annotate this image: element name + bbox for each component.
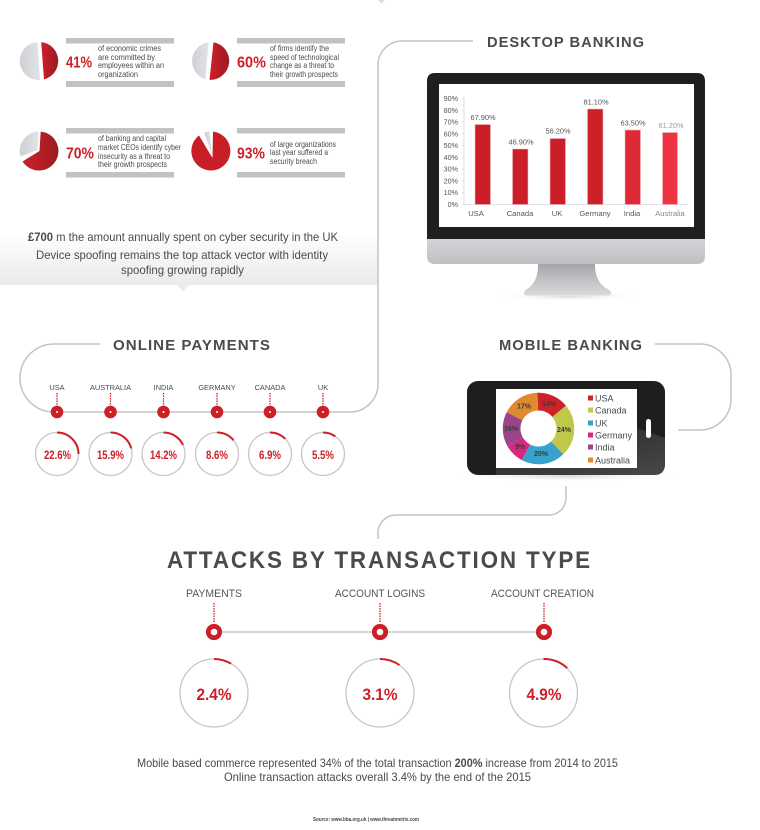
donut legend: Australia (595, 456, 630, 466)
phone shadow (448, 470, 684, 482)
country labels: INDIA (154, 383, 173, 392)
category labels: PAYMENTS (186, 588, 242, 600)
donut legend: UK (595, 418, 608, 428)
stat bars (66, 128, 174, 178)
pie 93% (191, 132, 230, 170)
callout text: £700 m the amount annually spent on cyber security in the UK (28, 230, 338, 244)
description: organization (98, 70, 138, 79)
country labels: AUSTRALIA (90, 383, 131, 392)
description: of large organizations (270, 140, 336, 149)
value labels: 67.90% (470, 113, 496, 122)
ring values: 3.1% (362, 685, 398, 704)
heading: desktop banking: DESKTOP BANKING (487, 35, 645, 51)
dotted stems (57, 393, 323, 406)
country labels: USA (49, 383, 65, 392)
closing statement: Mobile based commerce represented 34% of the total transaction 200% increase from 2014 to 2015 (137, 756, 618, 770)
axes (462, 98, 688, 204)
transaction type timeline (180, 588, 594, 727)
online payments timeline (36, 383, 344, 476)
percentage rings (36, 432, 344, 476)
description (98, 44, 164, 79)
callout band: UK spending and device spoofing (0, 230, 378, 291)
pie 70% (20, 132, 58, 171)
value labels: 63.50% (620, 118, 646, 128)
value 70%: 70% (66, 146, 94, 162)
donut labels: 9% (515, 444, 526, 451)
phone body (467, 381, 665, 475)
y axis labels: 90% (444, 94, 459, 103)
donut legend: USA (595, 394, 614, 404)
value 60%: 60% (237, 54, 266, 72)
callout text: spoofing growing rapidly (121, 263, 244, 277)
connector line: mobile banking (655, 344, 731, 430)
ring values: 15.9% (97, 450, 124, 462)
donut labels: 24% (557, 427, 572, 434)
donut legend (588, 394, 633, 466)
description: of economic crimes (98, 44, 161, 53)
stat bars (66, 38, 174, 87)
donut labels (504, 401, 572, 458)
description: insecurity as a threat to (98, 152, 170, 161)
ring values: 4.9% (526, 685, 562, 704)
y axis labels: 70% (444, 118, 459, 126)
monitor stand (496, 264, 640, 302)
stat bars (237, 128, 345, 178)
category labels (468, 209, 686, 218)
value 41%: 41% (66, 54, 92, 72)
donut chart (504, 401, 572, 458)
description (98, 134, 181, 169)
ring values: 5.5% (312, 450, 334, 462)
y axis labels: 10% (444, 188, 459, 197)
country labels: CANADA (255, 383, 285, 392)
stat: 41% economic crimes (20, 38, 174, 87)
y axis labels: 20% (444, 176, 459, 186)
callout text (28, 230, 338, 277)
country labels: GERMANY (198, 383, 236, 392)
stat bars (237, 38, 345, 87)
ring values: 6.9% (259, 450, 281, 462)
category labels: UK (552, 209, 562, 218)
category labels: ACCOUNT LOGINS (335, 588, 425, 600)
value labels: 56.20% (545, 126, 571, 136)
title: attacks by transaction type: ATTACKS BY TRANSACTION TYPE (167, 547, 592, 574)
donut legend: Germany (595, 430, 633, 440)
y axis labels: 0% (448, 200, 459, 209)
ring values: 22.6% (44, 450, 71, 462)
description: are committed by (98, 53, 155, 62)
description: change as a threat to (270, 61, 334, 70)
ring arcs (214, 659, 567, 668)
closing statement: Online transaction attacks overall 3.4% by the end of the 2015 (224, 770, 531, 784)
description: their growth prospects (98, 160, 167, 169)
callout text: Device spoofing remains the top attack vector with identity (36, 248, 328, 262)
stat: 93% security breach (191, 128, 345, 178)
ring values: 8.6% (206, 450, 228, 462)
description (270, 44, 339, 79)
country labels (49, 383, 328, 392)
ring values: 2.4% (196, 685, 232, 704)
connector line: mobile banking to attacks title (378, 486, 566, 539)
y axis labels: 40% (444, 153, 459, 162)
category labels: Canada (507, 209, 534, 218)
description: market CEOs identify cyber (98, 143, 181, 152)
top marker (378, 0, 385, 4)
stat: 70% CEOs (20, 128, 181, 178)
category labels: USA (468, 209, 485, 218)
category labels: Germany (579, 209, 611, 218)
description: of firms identify the (270, 44, 329, 53)
category labels (186, 588, 594, 600)
category labels: Australia (655, 209, 686, 218)
ring values (44, 450, 334, 462)
y axis labels: 80% (444, 106, 459, 115)
bar chart (444, 94, 688, 218)
timeline nodes (208, 626, 550, 638)
y axis labels: 30% (444, 164, 459, 174)
donut labels: 20% (534, 451, 549, 458)
y axis labels: 60% (444, 130, 459, 138)
y axis labels (444, 94, 459, 209)
description: security breach (270, 157, 317, 166)
country labels: UK (318, 383, 328, 392)
timeline nodes (51, 406, 329, 418)
ring values (196, 685, 562, 704)
description: employees within an (98, 61, 164, 70)
pie 41% (20, 42, 58, 80)
heading: mobile banking: MOBILE BANKING (499, 338, 643, 354)
donut labels: 17% (517, 404, 532, 410)
source line: Source: www.bba.org.uk | www.threatmetrix.com (313, 817, 419, 823)
timeline line (214, 631, 544, 633)
value labels (470, 98, 684, 146)
value labels: 46.90% (508, 138, 534, 146)
ring arcs (57, 432, 335, 454)
closing statement (137, 756, 618, 784)
description: speed of technological (270, 53, 339, 62)
ring values: 14.2% (150, 450, 177, 462)
pie 60% (192, 42, 229, 80)
description: their growth prospects (270, 70, 338, 79)
description: last year suffered a (270, 148, 328, 157)
smartphone with donut chart (448, 381, 684, 482)
heading: online payments: ONLINE PAYMENTS (113, 338, 271, 354)
bars (475, 109, 678, 204)
dotted stems (214, 603, 544, 622)
percentage rings (180, 659, 578, 727)
donut labels: 16% (504, 426, 519, 433)
donut labels: 14% (542, 401, 557, 408)
category labels: ACCOUNT CREATION (491, 588, 594, 600)
value labels: 61.20% (658, 121, 684, 130)
band background with pointer (0, 232, 378, 291)
donut legend: India (595, 442, 615, 452)
desktop monitor with bar chart (427, 73, 705, 302)
value 93%: 93% (237, 146, 265, 162)
donut legend: Canada (595, 406, 627, 416)
description (270, 140, 336, 166)
monitor body (427, 73, 705, 264)
category labels: India (624, 209, 641, 218)
connector line: online payments to desktop banking (20, 41, 473, 412)
value labels: 81.10% (583, 98, 609, 106)
stat: 60% technological change (192, 38, 345, 87)
y axis labels: 50% (444, 141, 459, 150)
description: of banking and capital (98, 134, 166, 143)
